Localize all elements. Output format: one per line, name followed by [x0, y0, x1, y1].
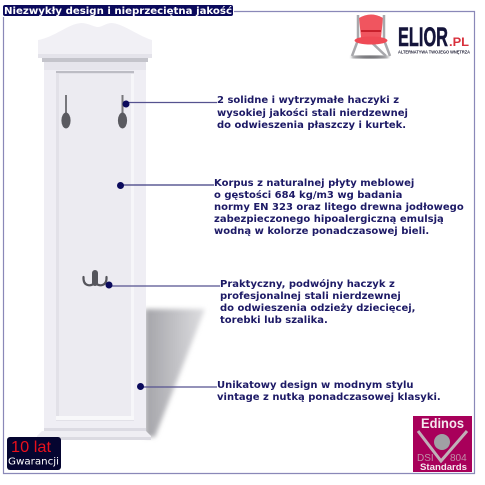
text block: design: Unikatowy design w modnym stylu [217, 380, 414, 391]
badge: Edinos standards: Edinos [421, 416, 464, 431]
logo domain: .PL [449, 35, 469, 49]
text block: body material [214, 178, 464, 237]
text block: double hook: torebki lub szalika. [220, 315, 328, 326]
icon: chair [351, 14, 390, 58]
logo wordmark: ELIOR [398, 22, 448, 52]
text block: hooks: 2 solidne i wytrzymałe haczyki z [217, 95, 399, 106]
icon: double hook [83, 273, 107, 285]
callout line 3 [106, 282, 220, 288]
icon: right hook [118, 95, 127, 128]
text block: design [217, 380, 441, 403]
callout line 2 [117, 182, 214, 189]
text block: double hook: profesjonalnej stali nierdzewnej [220, 291, 401, 302]
text block: body material: wodną w kolorze ponadczasowej bieli. [214, 226, 429, 237]
callout line 4 [137, 383, 217, 390]
logo tagline: ALTERNATYWA TWOJEGO WNĘTRZA [398, 50, 470, 56]
rack body [44, 62, 146, 428]
text block: body material: normy EN 323 oraz litego drewna jodłowego [214, 202, 464, 213]
badge: 10 lat warranty [7, 437, 61, 470]
icon: left hook [61, 95, 71, 128]
callout line 1 [122, 100, 217, 108]
text block: body material: zabezpieczonego hipoalergiczną emulsją [214, 214, 444, 225]
badge: Edinos standards: DSI [417, 453, 434, 464]
badge: 10 lat warranty: Gwarancji [8, 456, 59, 468]
text block: hooks: do odwieszenia płaszczy i kurtek. [217, 120, 406, 131]
badge: Edinos standards: 804 [450, 453, 467, 464]
text block: body material: Korpus z naturalnej płyty meblowej [214, 178, 414, 189]
badge: Edinos standards: Standards [420, 462, 467, 473]
text block: double hook: do odwieszenia odzieży dziecięcej, [220, 303, 415, 314]
text block: design: vintage z nutką ponadczasowej klasyki. [217, 392, 441, 403]
logo: Elior [351, 14, 470, 58]
coat rack panel [37, 23, 152, 440]
wall shadow [145, 309, 205, 437]
text block: double hook: Praktyczny, podwójny haczyk z [220, 278, 395, 290]
text block: body material: o gęstości 684 kg/m3 wg badania [214, 189, 402, 201]
title bar: Niezwykły design i nieprzeciętna jakość [4, 5, 232, 17]
badge: Edinos standards [413, 416, 472, 473]
rack base [44, 428, 146, 431]
rack inset panel [56, 71, 134, 421]
text block: hooks [217, 95, 408, 131]
rack crown [38, 23, 152, 58]
text block: hooks: wysokiej jakości stali nierdzewnej [217, 107, 408, 119]
badge: 10 lat warranty: 10 lat [11, 439, 52, 456]
text block: double hook [220, 278, 415, 326]
